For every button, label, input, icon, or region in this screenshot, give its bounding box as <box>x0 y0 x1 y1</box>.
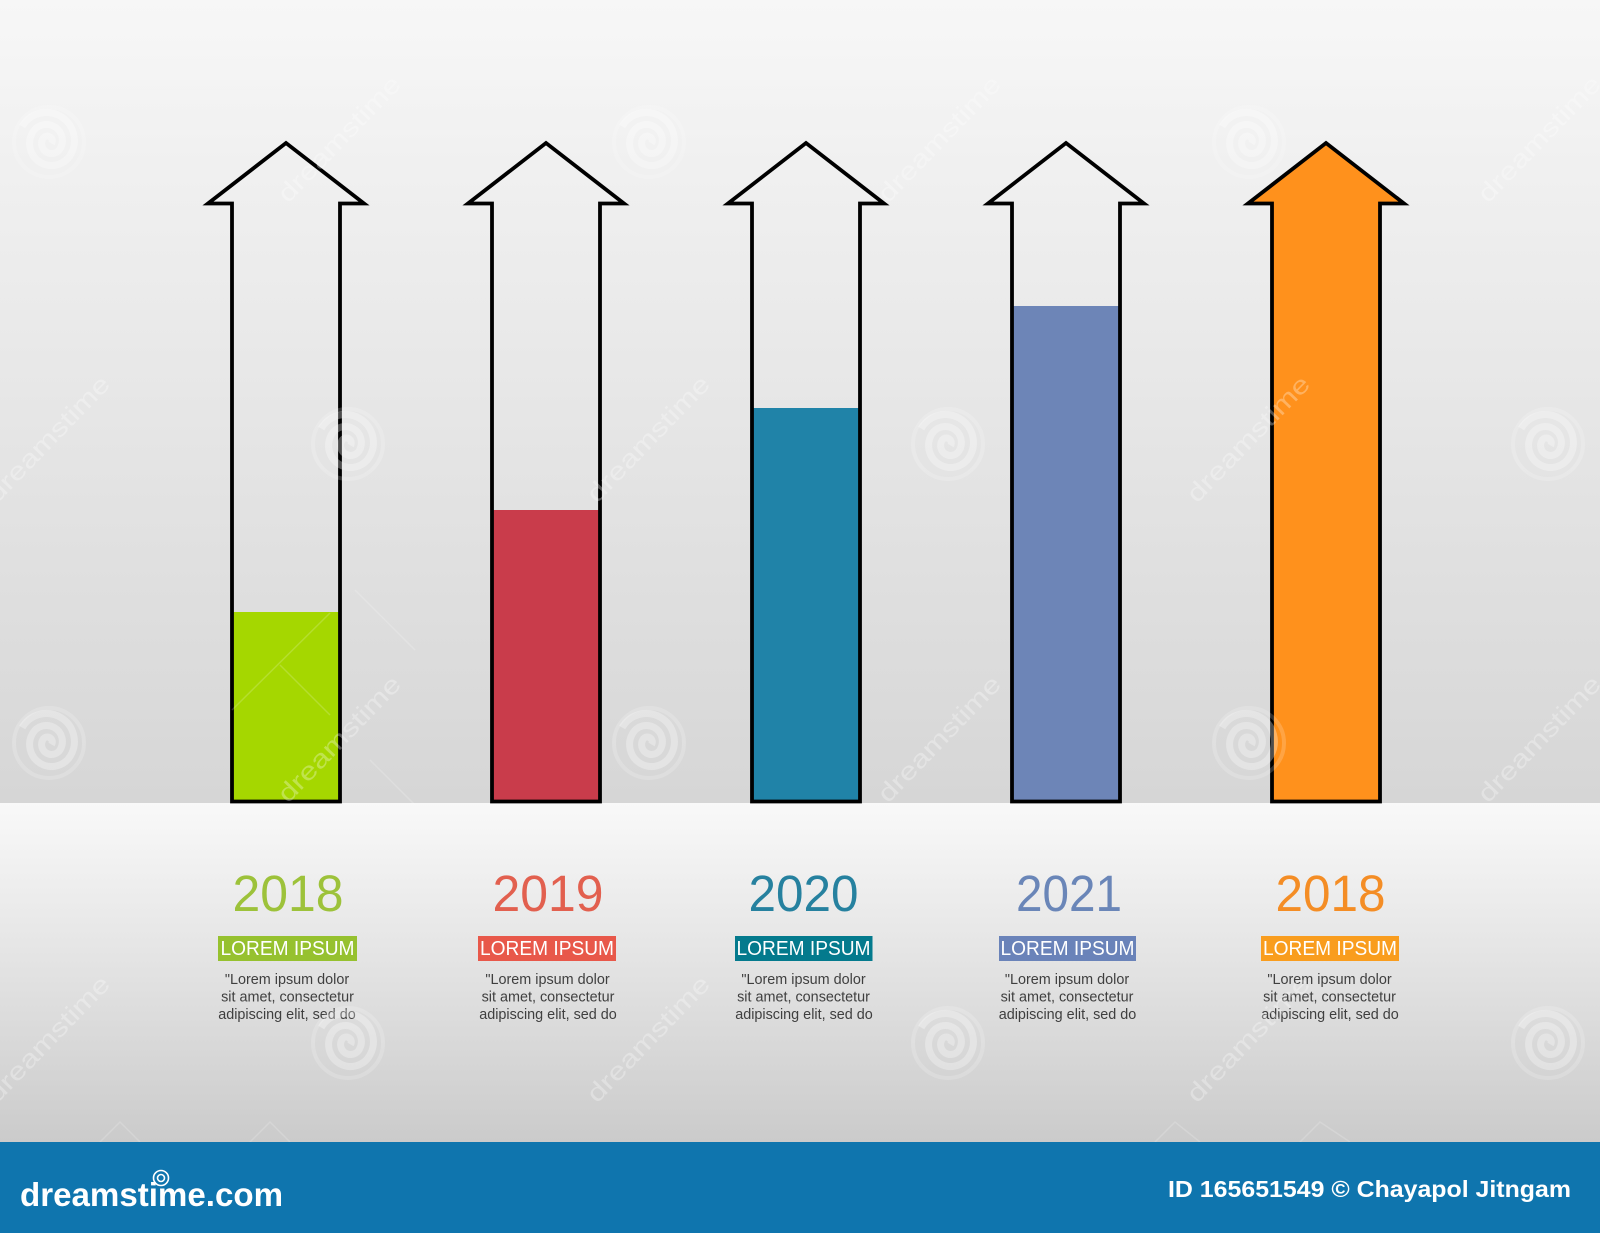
column 4: 2021 <box>988 143 1144 1023</box>
column 5: 2018 orange <box>1248 143 1404 1023</box>
footer logo spiral <box>154 1170 168 1186</box>
description 2020: sit amet, consectetur <box>737 990 870 1006</box>
description 2019: sit amet, consectetur <box>482 990 615 1006</box>
description 2020: adipiscing elit, sed do <box>735 1007 873 1023</box>
background floor <box>0 803 1600 1142</box>
description 2018: "Lorem ipsum dolor <box>225 972 349 988</box>
column 2: 2019 <box>468 143 624 1023</box>
watermark text: dreamstime <box>1472 70 1600 208</box>
description 2020: "Lorem ipsum dolor <box>741 972 866 988</box>
bar fill 2019 <box>492 510 600 802</box>
description 2021: "Lorem ipsum dolor <box>1005 972 1129 988</box>
label 2019: LOREM IPSUM <box>480 938 614 960</box>
label 2018: LOREM IPSUM <box>220 938 354 960</box>
year 2019: 2019 <box>492 865 604 922</box>
description 2018 orange: adipiscing elit, sed do <box>1261 1007 1399 1023</box>
description 2019: adipiscing elit, sed do <box>479 1007 617 1023</box>
full orange arrow <box>1248 143 1404 802</box>
description 2018 orange: "Lorem ipsum dolor <box>1267 972 1392 988</box>
description 2018: adipiscing elit, sed do <box>218 1007 356 1023</box>
watermark text: dreamstime <box>1181 970 1316 1108</box>
bar fill 2021 <box>1012 306 1120 802</box>
description 2021: sit amet, consectetur <box>1001 990 1134 1006</box>
watermark text: dreamstime <box>581 370 716 508</box>
column 1: 2018 <box>208 143 364 1023</box>
label 2018 orange: LOREM IPSUM <box>1263 938 1397 960</box>
year 2018 orange: 2018 <box>1276 865 1386 922</box>
description 2021: adipiscing elit, sed do <box>999 1007 1136 1023</box>
description 2019: "Lorem ipsum dolor <box>485 972 610 988</box>
watermark text: dreamstime <box>872 670 1007 808</box>
arrow outline 2021 <box>988 143 1144 802</box>
watermark text: dreamstime <box>581 970 716 1108</box>
bar fill 2020 <box>752 408 860 802</box>
year 2018: 2018 <box>232 865 344 922</box>
watermark spirals <box>11 102 1584 1078</box>
watermark text: dreamstime <box>1181 370 1316 508</box>
watermark text: dreamstime <box>1472 670 1600 808</box>
bar fill 2018 <box>232 612 340 802</box>
description 2018: sit amet, consectetur <box>221 990 354 1006</box>
arrow outline 2019 <box>468 143 624 802</box>
watermark text: dreamstime <box>872 70 1007 208</box>
arrow outline 2018 <box>208 143 364 802</box>
footer logo: dreamstime.com <box>20 1176 283 1213</box>
watermark text: dreamstime <box>272 670 407 808</box>
background wall <box>0 0 1600 803</box>
image id credit: ID 165651549 © Chayapol Jitngam <box>1168 1176 1571 1202</box>
watermark text: dreamstime <box>272 70 407 208</box>
footer bar <box>0 1142 1600 1233</box>
label 2021: LOREM IPSUM <box>1000 938 1134 960</box>
year 2021: 2021 <box>1016 865 1122 922</box>
arrow outline 2020 <box>728 143 884 802</box>
year 2020: 2020 <box>748 865 858 922</box>
column 3: 2020 <box>728 143 884 1023</box>
description 2018 orange: sit amet, consectetur <box>1263 990 1396 1006</box>
label 2020: LOREM IPSUM <box>736 938 870 960</box>
